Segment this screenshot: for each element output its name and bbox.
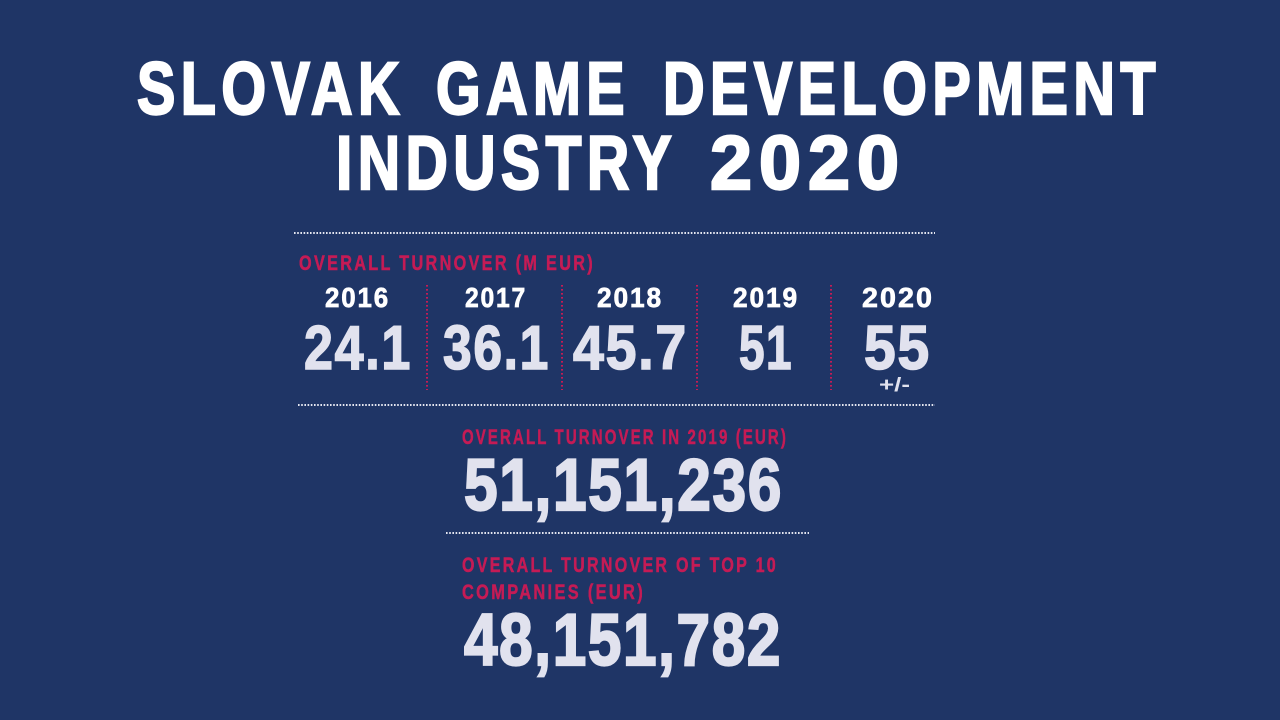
column: 2018: 45.7 — [573, 314, 688, 383]
title: SLOVAK — [137, 47, 405, 130]
column: 2017: 36.1 — [443, 314, 550, 383]
column: 2018: 2018 — [597, 282, 663, 313]
column: 2019 — [733, 282, 799, 383]
column: 2016: 24.1 — [304, 314, 412, 383]
column: 2020 — [862, 282, 934, 396]
title: INDUSTRY — [336, 121, 677, 206]
column: 2017: 2017 — [465, 282, 527, 313]
column: 2019: 2019 — [733, 282, 799, 313]
stat: overall turnover in 2019: OVERALL TURNOVER IN 2019 (EUR) — [462, 426, 788, 449]
stat: overall turnover in 2019: 51,151,236 — [464, 445, 783, 526]
column: 2020: +/- — [879, 375, 910, 396]
stat: overall turnover of top 10 companies: COMPANIES (EUR) — [462, 581, 645, 604]
column: 2020: 55 — [864, 314, 931, 383]
column: 2016 — [304, 282, 412, 383]
title: GAME — [436, 47, 630, 130]
stat: overall turnover in 2019 — [462, 426, 788, 526]
panel: overall turnover by year — [299, 252, 934, 396]
stat: overall turnover of top 10 companies: 48,151,782 — [464, 600, 782, 681]
column: 2020: 2020 — [862, 282, 934, 313]
stat: overall turnover of top 10 companies — [462, 554, 782, 681]
title — [137, 47, 1161, 206]
title: 2020 — [710, 121, 906, 206]
column: 2019: 51 — [739, 314, 793, 383]
stat: overall turnover of top 10 companies: OVERALL TURNOVER OF TOP 10 — [462, 554, 778, 577]
column: 2017 — [443, 282, 550, 383]
column: 2016: 2016 — [325, 282, 390, 313]
heading: overall turnover (M EUR): OVERALL TURNOVER (M EUR) — [299, 252, 595, 275]
column: 2018 — [573, 282, 688, 383]
